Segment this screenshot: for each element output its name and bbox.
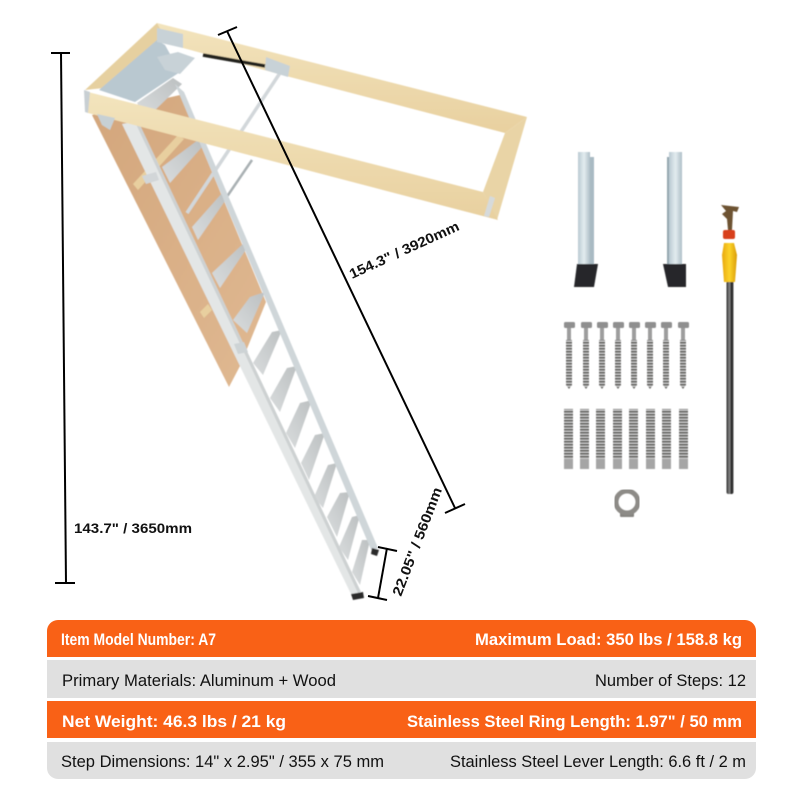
hinge bracket at front [97, 114, 115, 130]
row 2: Primary Materials: Aluminum + Wood [62, 671, 336, 690]
support arm [187, 73, 280, 213]
row 4: Step Dimensions: 14" x 2.95" / 355 x 75 mm [61, 752, 384, 771]
row 2: Number of Steps: 12 [595, 671, 746, 690]
rail feet [351, 548, 379, 600]
metal plates [157, 28, 290, 77]
left frame beam [85, 23, 165, 90]
right post [663, 152, 686, 287]
corner plate left [84, 90, 90, 113]
accessories: support posts [574, 152, 686, 287]
hook head [721, 205, 739, 230]
dimension: overall height [51, 53, 192, 583]
row 3 [47, 701, 756, 738]
height label: 143.7" / 3650mm [74, 520, 192, 536]
accessories: lag screws [564, 322, 689, 389]
row 4: Stainless Steel Lever Length: 6.6 ft / 2 m [450, 752, 746, 771]
gas strut [203, 55, 265, 66]
ladder steps [137, 78, 370, 585]
row 1: Maximum Load: 350 lbs / 158.8 kg [475, 630, 742, 649]
red collar [723, 230, 735, 239]
accessories: expansion anchors [564, 409, 688, 469]
wooden lower block [200, 304, 212, 318]
row 1: Item Model Number: A7 [61, 630, 216, 649]
row 2 [47, 660, 756, 698]
front frame beam [88, 92, 498, 220]
rail bracket upper [142, 172, 159, 184]
right rail [175, 84, 378, 552]
yellow grip [722, 243, 737, 282]
pole shaft [726, 280, 734, 494]
dimension: ladder length [218, 27, 465, 513]
length label: 154.3" / 3920mm [347, 218, 462, 282]
accessories: lever pole [721, 205, 739, 494]
accessories: ring nut [616, 491, 638, 517]
rail bracket lower [234, 342, 248, 354]
plywood door panel [92, 95, 266, 387]
corner plate right [484, 196, 495, 217]
width label: 22.05" / 560mm [389, 485, 445, 598]
left rail shade [135, 121, 361, 593]
metal hinge box [99, 40, 180, 102]
ladder product illustration [84, 23, 527, 600]
row 4 [47, 742, 756, 779]
dimension: width [368, 485, 445, 600]
row 3: Stainless Steel Ring Length: 1.97" / 50 mm [407, 712, 742, 731]
spec table [47, 620, 756, 779]
left post [574, 152, 598, 287]
right frame beam [483, 117, 527, 220]
left rail [122, 121, 361, 596]
row 1 [47, 620, 756, 657]
rear frame beam [157, 23, 527, 133]
row 3: Net Weight: 46.3 lbs / 21 kg [62, 712, 286, 731]
wooden cross block [133, 135, 184, 190]
